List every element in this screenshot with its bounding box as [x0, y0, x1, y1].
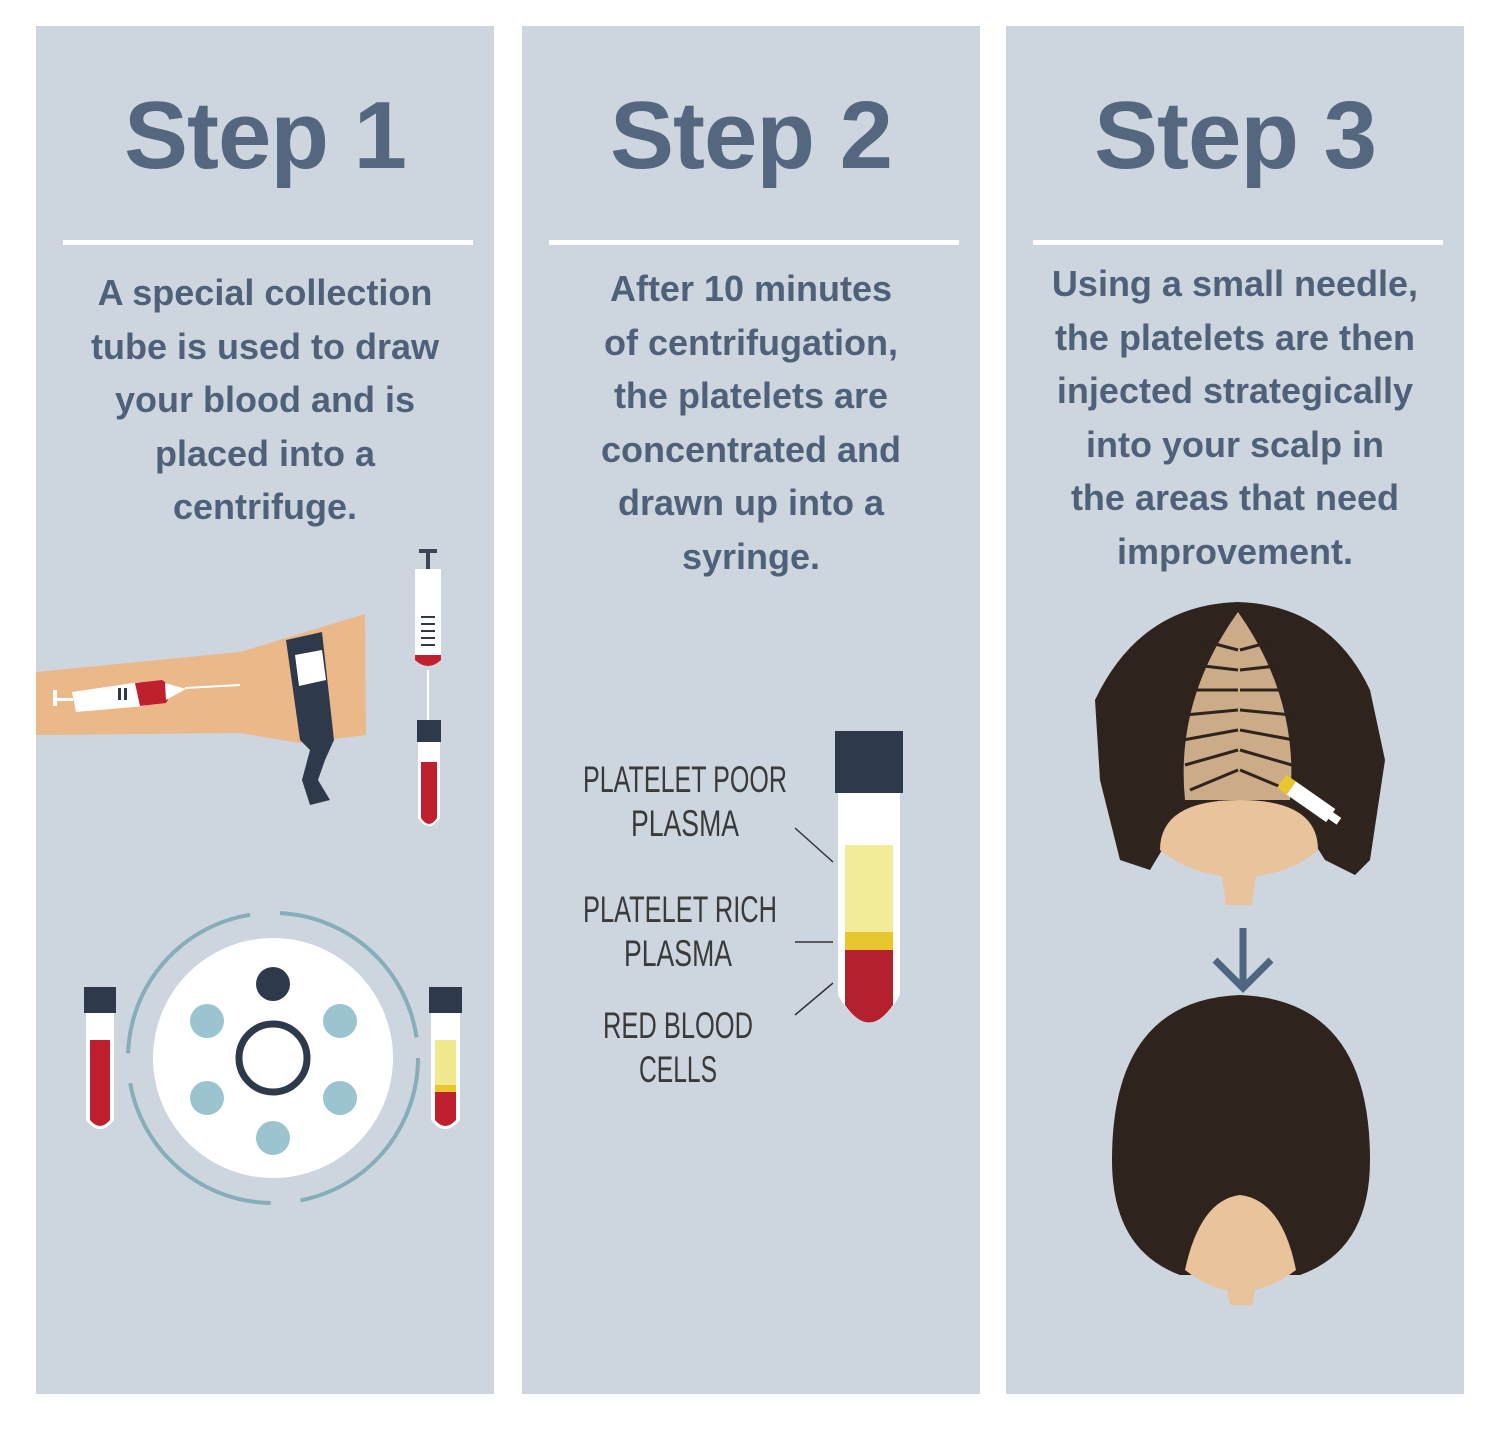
text: step 3 description: improvement. [1117, 530, 1353, 572]
text: step 1 description: tube is used to draw [91, 326, 439, 366]
text: step 3 description: the platelets are then [1055, 316, 1415, 358]
arrow: down [1215, 928, 1271, 988]
icon: full head of hair [1112, 995, 1370, 1305]
panel: step 2 [522, 26, 980, 1394]
labels: blood layers [583, 759, 833, 1090]
text: step 1 description: A special collection [98, 272, 432, 313]
text: step 2 description: of centrifugation, [604, 322, 898, 362]
icon: thinning head with syringe [1095, 602, 1385, 905]
text: step 1 description: your blood and is [115, 379, 415, 420]
text: step 3 description [1052, 263, 1418, 572]
heading: step 1: Step 1 [124, 82, 406, 189]
panel: step 3 [1006, 26, 1464, 1394]
heading: step 2: Step 2 [610, 82, 892, 189]
text: step 3 description: injected strategically [1057, 370, 1413, 411]
text: step 2 description: concentrated and [601, 428, 901, 470]
text: step 2 description: drawn up into a [618, 482, 884, 523]
text: step 3 description: into your scalp in [1086, 424, 1384, 464]
text: step 1 description: centrifuge. [173, 486, 357, 527]
icon: arm with syringe and tourniquet [36, 614, 366, 805]
icon: vertical syringe and tube [415, 549, 441, 826]
text: step 1 description: placed into a [155, 432, 375, 474]
heading: step 3: Step 3 [1094, 82, 1376, 189]
labels: blood layers: PLASMA [631, 803, 739, 844]
labels: blood layers: PLATELET POOR [583, 759, 787, 800]
labels: blood layers: PLASMA [624, 933, 732, 974]
text: step 2 description [601, 268, 901, 576]
icon: separated blood tube [835, 731, 903, 1022]
labels: blood layers: PLATELET RICH [583, 889, 777, 930]
labels: blood layers: RED BLOOD [603, 1005, 753, 1046]
panel: step 1 [36, 26, 494, 1394]
text: step 3 description: the areas that need [1071, 477, 1399, 518]
text: step 2 description: the platelets are [614, 375, 888, 416]
text: step 2 description: After 10 minutes [610, 268, 892, 309]
labels: blood layers: CELLS [639, 1049, 717, 1090]
text: step 2 description: syringe. [682, 536, 820, 576]
icon: centrifuge [84, 913, 462, 1203]
text: step 1 description [91, 272, 439, 527]
text: step 3 description: Using a small needle, [1052, 263, 1418, 304]
